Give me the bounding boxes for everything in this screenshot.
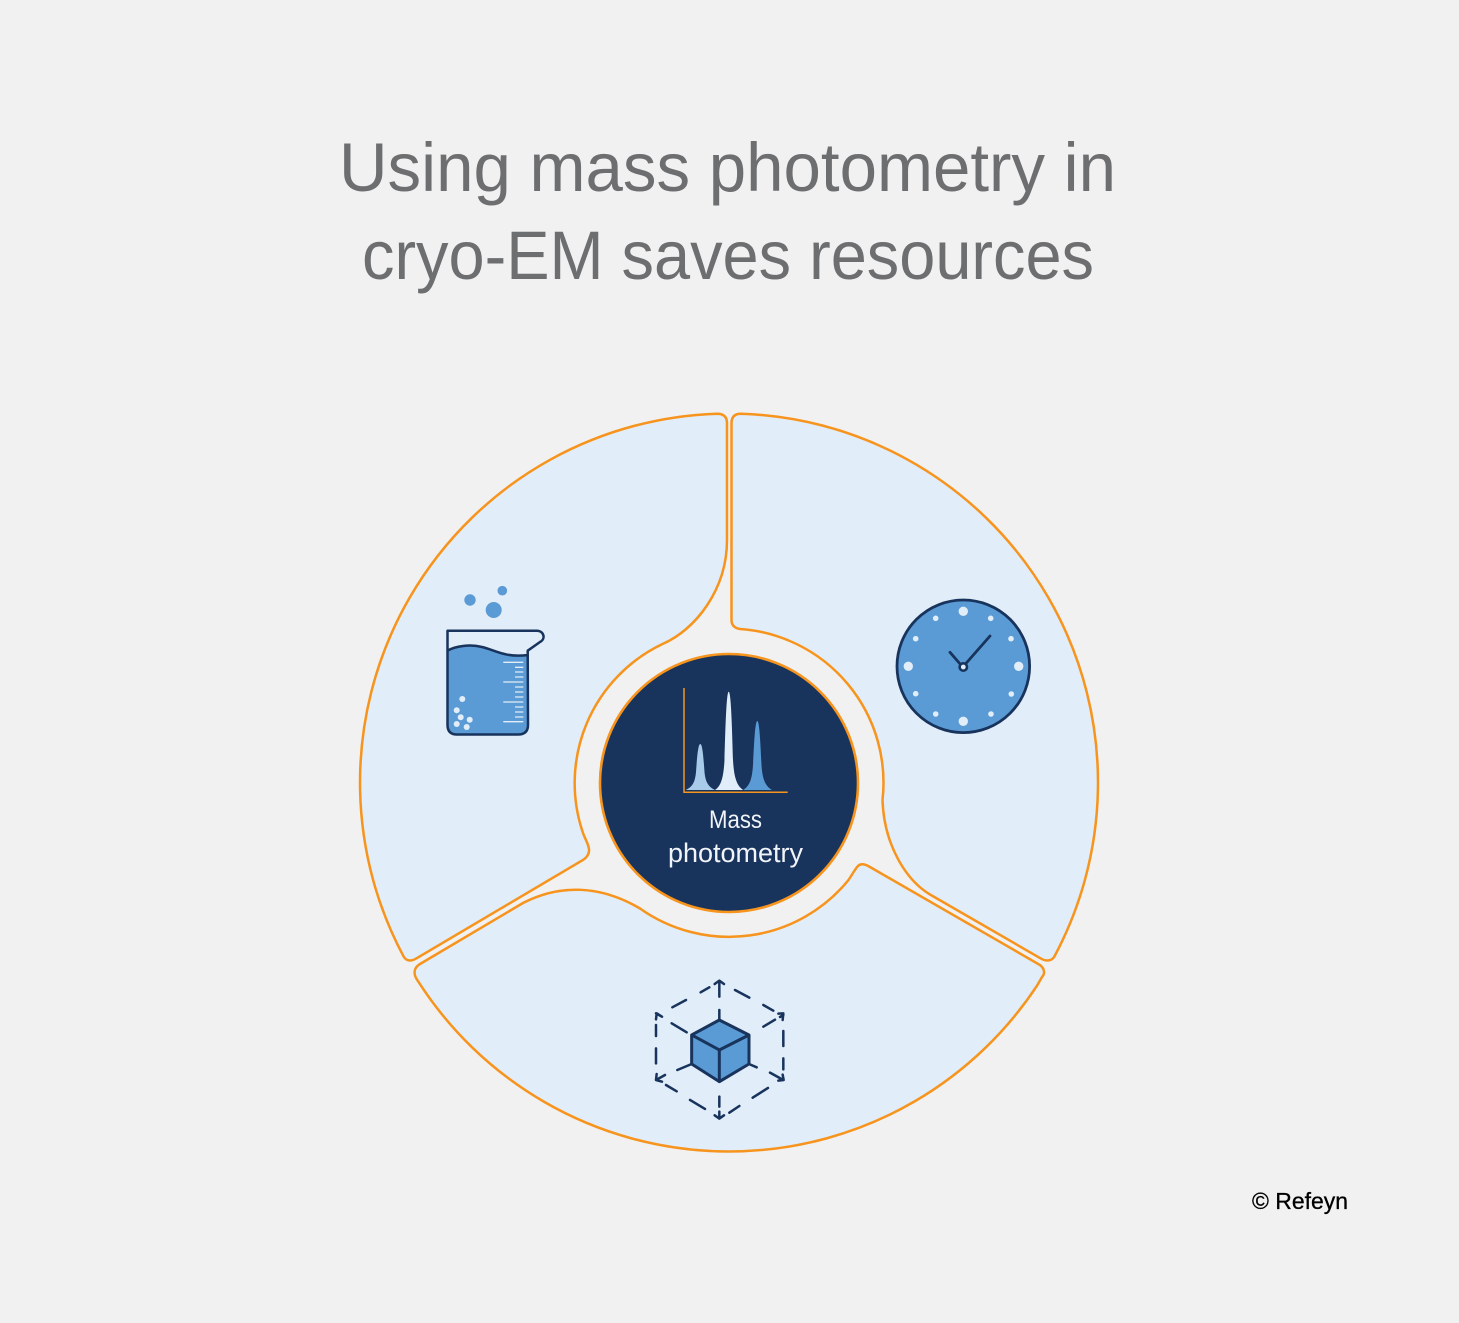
centre circle: mass photometry [600, 654, 858, 912]
centre label: Mass [709, 806, 762, 834]
chart axes [684, 688, 788, 792]
centre label: photometry [668, 838, 803, 868]
copyright credit: © Refeyn [1252, 1188, 1348, 1214]
title: Using mass photometry in [339, 129, 1116, 206]
title [339, 129, 1116, 294]
clock centre pin [960, 663, 967, 671]
dashed expansion hexagon and arrows [656, 981, 784, 1119]
clock hands [950, 636, 990, 665]
peak: tall [715, 692, 743, 790]
chart: mass photometry peaks [684, 688, 788, 792]
icon: 3D cube with dashed hexagon [656, 981, 784, 1119]
cube inner edges [692, 1035, 749, 1082]
bubbles above beaker [464, 586, 507, 618]
navy disc [600, 654, 858, 912]
icon: clock [897, 600, 1030, 733]
solid cube [692, 1020, 749, 1082]
panel: sample (left segment) [360, 414, 727, 960]
icon: beaker with bubbles [448, 586, 544, 734]
panel: time (right segment) [732, 414, 1098, 960]
panel: data collection (bottom segment) [415, 864, 1044, 1151]
peak: medium [743, 721, 772, 790]
title: cryo-EM saves resources [362, 217, 1094, 294]
peak: small [686, 744, 715, 790]
centre label [668, 806, 803, 868]
beaker outline [448, 631, 544, 734]
beaker liquid [448, 646, 528, 734]
beaker particles [454, 696, 473, 730]
clock hour marks [904, 607, 1023, 726]
clock face [897, 600, 1030, 733]
beaker scale ticks [503, 662, 523, 722]
